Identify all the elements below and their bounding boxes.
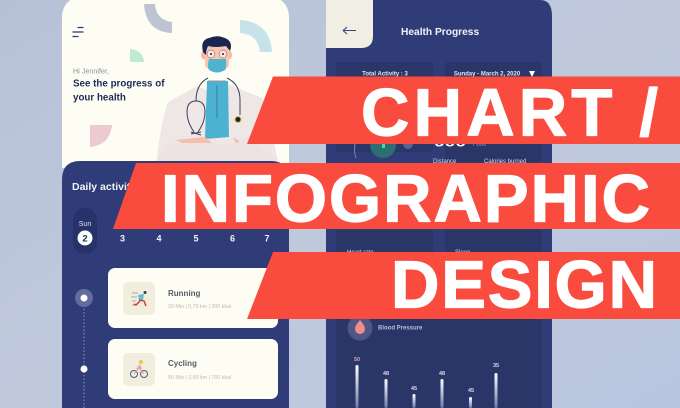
panel: heart rate: Heart rate (347, 250, 374, 256)
date selector: 6 (230, 234, 235, 244)
icon: blood drop (348, 316, 372, 340)
banner: design: DESIGN (391, 248, 657, 322)
panel: date selector and totals: / 000 (473, 142, 487, 148)
panel: sleep (445, 230, 542, 256)
panel: total activity: Total Activity : 3 (362, 72, 408, 78)
bar chart: 48 (439, 371, 445, 377)
decorative arcs (90, 4, 272, 147)
icon: cyclist (130, 360, 148, 378)
illustration: doctor (157, 36, 278, 161)
bar chart (354, 357, 499, 408)
timeline (75, 289, 93, 408)
panel: heart rate (336, 230, 433, 256)
panel: date selector and totals (433, 62, 542, 165)
panel: blood pressure chart (336, 316, 542, 408)
panel: right phone health progress (326, 0, 552, 408)
panel: sleep: Sleep (455, 250, 471, 256)
panel: date selector and totals: 000 (434, 136, 467, 150)
card: running (108, 268, 278, 328)
bar chart: 45 (411, 386, 417, 392)
panel: total activity (336, 62, 433, 158)
selected day: sunday: Sun (79, 221, 91, 228)
card: running: Running (168, 289, 201, 298)
banner: chart (247, 76, 680, 150)
text: greeting (73, 66, 165, 104)
panel: greeting phone (62, 0, 289, 168)
bar chart: 48 (383, 371, 389, 377)
card: cycling (108, 339, 278, 399)
panel: daily activity phone (62, 161, 289, 408)
card: cycling: Cycling (168, 359, 197, 368)
date selector: 3 (120, 234, 125, 244)
bar chart: 35 (493, 363, 499, 369)
card: cycling: 50 Min | 3,50 km | 700 kkal (168, 375, 231, 381)
text: greeting: Hi Jennifer, (73, 66, 109, 76)
banner: infographic: INFOGRAPHIC (161, 162, 650, 236)
text: greeting: See the progress of (73, 78, 165, 90)
date selector: 5 (193, 234, 199, 244)
panel: date selector and totals: Distance (433, 159, 457, 165)
bar chart: 50 (354, 357, 360, 363)
banner: chart: CHART / (361, 76, 658, 150)
icon: menu (73, 28, 83, 36)
card: running: 30 Min | 0,79 km | 300 kkal (168, 304, 231, 310)
date selector: 7 (264, 234, 270, 244)
text: greeting: your health (73, 92, 126, 104)
selected day: sunday: 2 (82, 234, 88, 244)
selected day: sunday (73, 208, 97, 254)
icon: runner (131, 291, 146, 306)
banner: design (247, 248, 680, 322)
date selector (73, 208, 270, 254)
panel: date selector and totals: Sunday - March 2, 2020 (454, 72, 521, 78)
label: blood pressure: Blood Pressure (378, 326, 423, 332)
panel: date selector and totals: Calories burned (484, 159, 526, 165)
icon: back button tab (326, 0, 373, 48)
heading: daily activity: Daily activity (72, 181, 136, 193)
icon: stethoscope (187, 78, 240, 135)
bar chart: 45 (468, 388, 474, 394)
heading: health progress: Health Progress (401, 27, 479, 38)
date selector: 4 (156, 234, 162, 244)
